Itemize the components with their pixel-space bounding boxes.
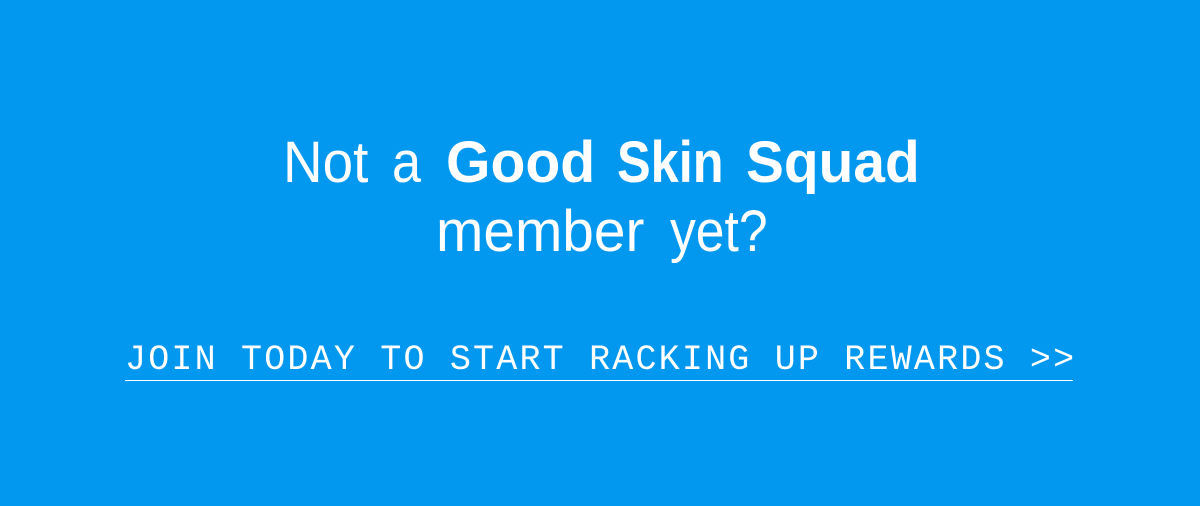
heading line 1: Not: [283, 130, 368, 195]
heading line 2: yet?: [670, 199, 768, 264]
heading line 2: member: [436, 199, 644, 264]
heading line 1: a: [392, 130, 421, 195]
heading line 1: [283, 130, 920, 195]
heading line 1: Squad: [746, 130, 920, 195]
call to action link: JOIN TODAY TO START RACKING UP REWARDS >>: [125, 340, 1073, 380]
heading line 1: Good: [446, 130, 595, 195]
heading: [283, 130, 920, 264]
heading line 1: Skin: [617, 130, 724, 195]
heading line 2: [436, 199, 768, 264]
